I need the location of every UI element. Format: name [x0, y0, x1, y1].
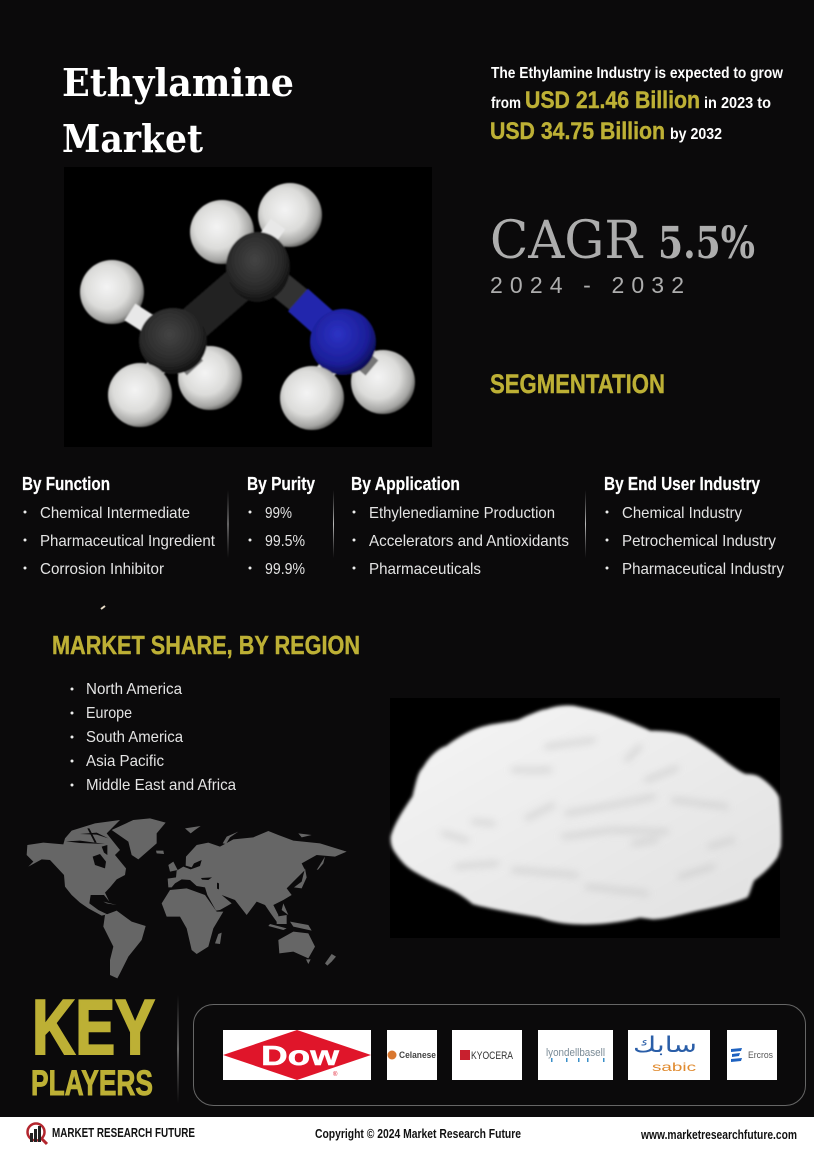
panel: by function: Chemical Intermediate: [40, 505, 190, 522]
icon: hydrogen atoms behind: [80, 183, 415, 414]
iceland and svalbard: [156, 826, 201, 854]
logo: celanese: [387, 1030, 437, 1080]
panel: by application: Pharmaceuticals: [369, 561, 481, 578]
world map: [27, 818, 347, 978]
list: regions: Asia Pacific: [86, 753, 164, 770]
logo: lyondellbasell: lyondellbasell: [546, 1047, 605, 1059]
title: Ethylamine: [62, 60, 294, 105]
heading: key players: PLAYERS: [31, 1064, 153, 1103]
greenland: [112, 818, 166, 859]
heading: segmentation: SEGMENTATION: [490, 369, 665, 399]
panel: by function: Pharmaceutical Ingredient: [40, 533, 216, 550]
list: regions: Europe: [86, 705, 132, 722]
panel: by application: Accelerators and Antioxidants: [369, 533, 569, 550]
madagascar: [215, 933, 222, 944]
market forecast text: [490, 65, 783, 145]
panel: by application: By Application: [351, 474, 460, 494]
panel: by function: By Function: [22, 474, 110, 494]
CAGR figure: [490, 211, 755, 298]
south america: [103, 911, 146, 978]
panel: by purity: [247, 474, 315, 578]
panel: by purity: 99%: [265, 505, 292, 522]
panel: by end user industry: By End User Industry: [604, 474, 760, 494]
title: [62, 60, 294, 161]
logo: dow: Dow: [261, 1040, 339, 1071]
panel: by application: Ethylenediamine Production: [369, 505, 555, 522]
new zealand: [325, 954, 336, 966]
market forecast text: from: [491, 95, 521, 112]
title: Market: [62, 116, 203, 161]
panel: by function: Corrosion Inhibitor: [40, 561, 165, 578]
panel: by purity: By Purity: [247, 474, 315, 494]
market forecast text: USD 34.75 Billion: [490, 118, 665, 145]
heading: key players: [31, 983, 155, 1103]
kamchatka: [317, 857, 325, 870]
panel: by end user industry: Pharmaceutical Industry: [622, 561, 784, 578]
panel: key player logos: [194, 1004, 806, 1106]
heading: market share by region: MARKET SHARE, BY REGION: [52, 630, 360, 660]
novaya zemlya: [223, 832, 312, 844]
icon: carbon and nitrogen atoms: [139, 232, 376, 375]
southeast asia islands: [268, 903, 312, 931]
panel: by end user industry: Petrochemical Industry: [622, 533, 776, 550]
logo: kyocera: [452, 1030, 522, 1080]
icon: hydrogen atoms in front: [108, 363, 344, 430]
heading: key players: KEY: [32, 983, 155, 1071]
logo: kyocera: KYOCERA: [471, 1050, 514, 1062]
black sea and caspian sea: [201, 877, 219, 889]
CAGR figure: CAGR: [490, 211, 644, 271]
logo: sabic: سابك: [633, 1033, 697, 1058]
japan: [294, 868, 307, 888]
image: ethylamine molecule: [64, 167, 432, 447]
caribbean: [103, 902, 117, 905]
logo: lyondellbasell: [538, 1030, 613, 1080]
icon: market research future logo: [28, 1124, 47, 1144]
logo: ercros: [727, 1030, 777, 1080]
panel: by purity: 99.9%: [265, 561, 305, 578]
CAGR figure: 2024 - 2032: [490, 272, 684, 298]
logo: sabic: [628, 1030, 710, 1080]
north america: [27, 820, 126, 916]
market forecast text: USD 21.46 Billion: [525, 87, 700, 114]
africa: [162, 888, 223, 954]
market forecast text: by 2032: [670, 126, 722, 143]
hudson bay and arctic channels: [66, 828, 108, 868]
australia: [278, 932, 315, 958]
panel: by end user industry: [604, 474, 784, 578]
list: regions: South America: [86, 729, 183, 746]
great britain: [168, 862, 178, 872]
list: regions: Middle East and Africa: [86, 777, 236, 794]
footer: MARKET RESEARCH FUTURE: [52, 1126, 195, 1140]
panel: by purity: 99.5%: [265, 533, 305, 550]
footer: [0, 1117, 814, 1150]
panel: by end user industry: Chemical Industry: [622, 505, 742, 522]
panel: by application: [351, 474, 569, 578]
footer: Copyright © 2024 Market Research Future: [315, 1127, 521, 1141]
image: white powder: [390, 698, 780, 938]
list: regions: [70, 681, 236, 794]
logo: dow: ®: [333, 1071, 338, 1078]
logo: celanese: Celanese: [399, 1050, 436, 1060]
logo: sabic: sabic: [652, 1060, 696, 1074]
CAGR figure: 5.5%: [658, 218, 755, 269]
eurasia: [168, 831, 347, 924]
panel: by function: [22, 474, 216, 578]
logo: dow: [223, 1030, 371, 1080]
market forecast text: in 2023 to: [704, 95, 771, 112]
logo: ercros: Ercros: [748, 1050, 773, 1060]
list: regions: North America: [86, 681, 182, 698]
